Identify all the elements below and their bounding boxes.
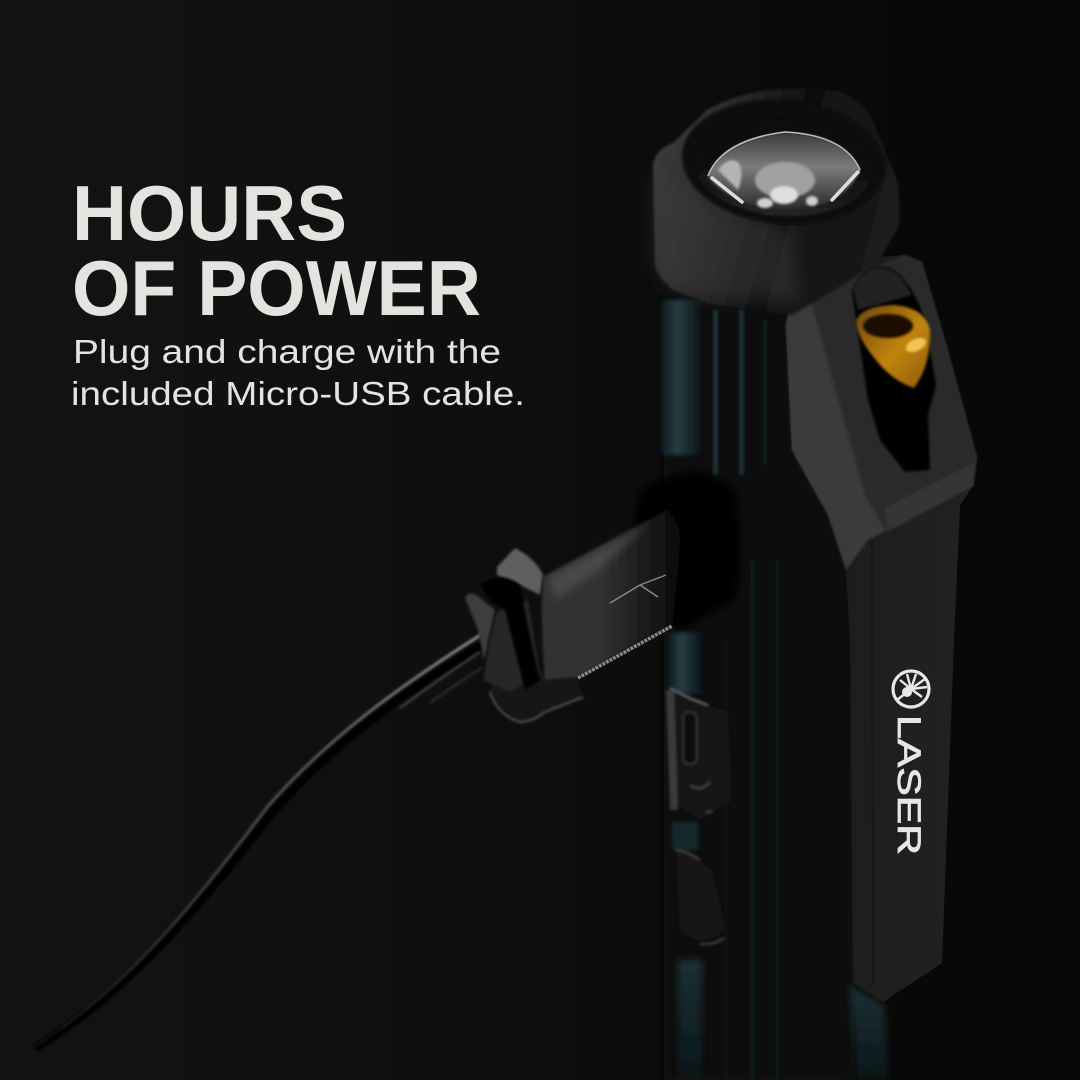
headline: HOURS: [72, 169, 347, 257]
flashlight clip: [786, 255, 977, 1002]
clip seam: [872, 540, 873, 985]
subtext: [71, 333, 525, 412]
clip upper face: [786, 288, 887, 570]
strain relief shadow: [620, 472, 740, 630]
clip shoulder: [808, 255, 977, 530]
inner ring: [677, 91, 889, 233]
upper teal body panel: [661, 300, 701, 455]
dark body mass: [664, 300, 854, 1080]
charging cable: [35, 634, 482, 1048]
USB symbol: [610, 575, 666, 603]
collar: [465, 593, 495, 660]
plug base: [490, 670, 583, 722]
flashlight body: [661, 300, 888, 1080]
rubber bezel: [653, 89, 900, 315]
gold screw: [856, 305, 930, 388]
logo emblem: [893, 671, 929, 707]
strap: [480, 578, 540, 690]
logo and brand: [891, 671, 929, 855]
lens: [708, 132, 860, 209]
bezel highlight: [655, 170, 800, 300]
headline: OF POWER: [72, 244, 481, 332]
lower teal body panels: [668, 632, 702, 694]
USB plug: [465, 472, 740, 722]
subtext: included Micro-USB cable.: [71, 375, 525, 412]
subtext: Plug and charge with the: [73, 333, 501, 370]
clip pocket: [852, 267, 936, 472]
brand text: LASER: [891, 715, 927, 855]
flashlight head: [653, 89, 900, 315]
plug body: [542, 510, 680, 680]
plug edge highlight: [578, 626, 672, 678]
clip arm: [786, 255, 977, 1002]
headline: [72, 169, 481, 332]
side port and buttons: [670, 688, 732, 944]
body grooves: [713, 310, 779, 1080]
